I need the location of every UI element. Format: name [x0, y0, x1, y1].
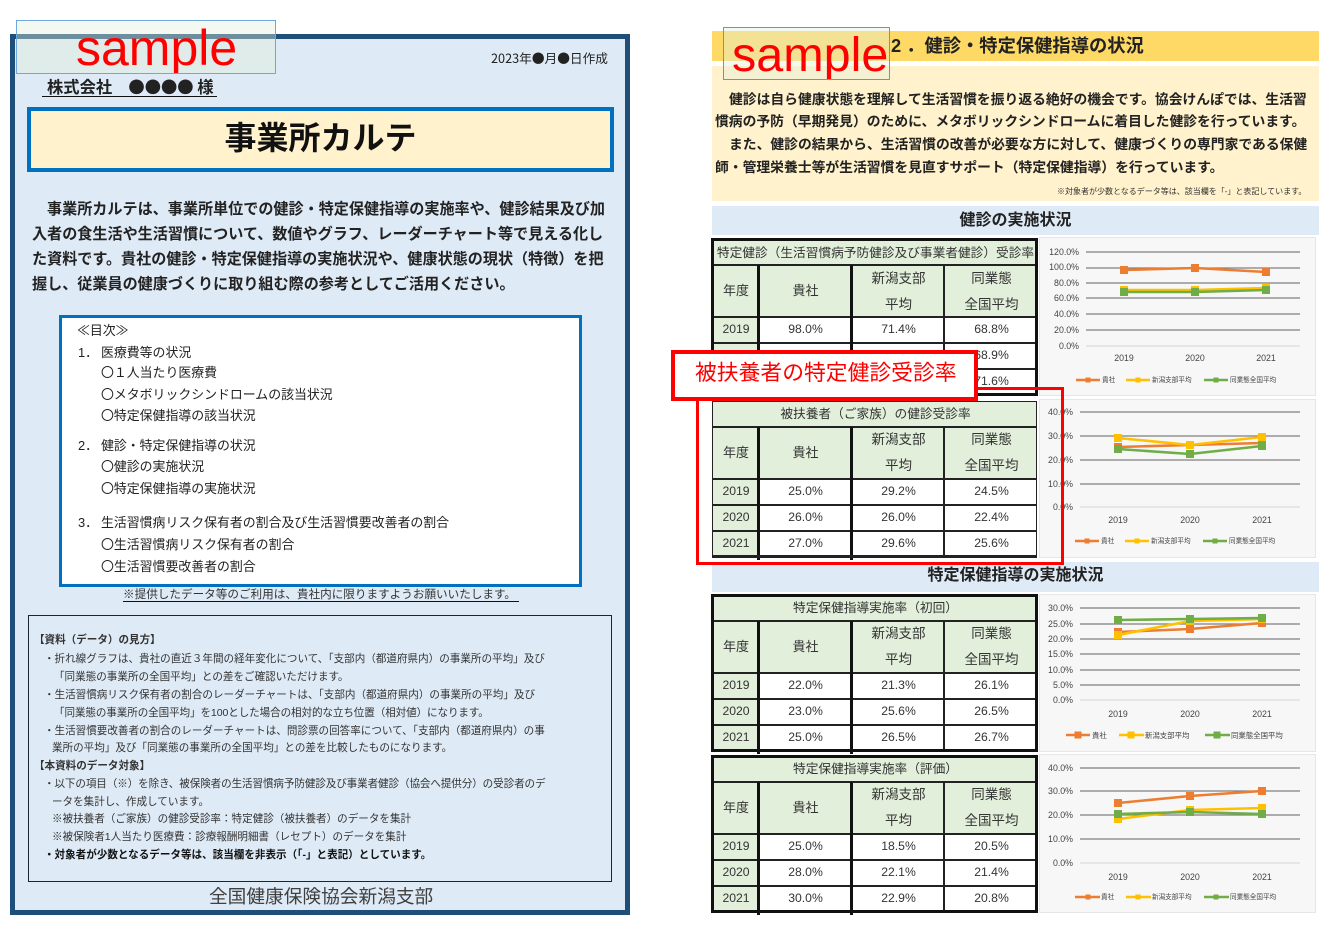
line chart: dependents checkup rate — [1040, 400, 1315, 557]
table: dependents checkup rate: 29.6% — [881, 536, 916, 550]
table: specific checkup rate: 98.0% — [788, 322, 823, 336]
table: dependents checkup rate — [712, 401, 1037, 557]
table: guidance rate evaluation: 20.5% — [974, 839, 1009, 853]
table of contents box: 1． — [78, 345, 98, 360]
table: guidance rate evaluation: 22.9% — [881, 891, 916, 905]
table: guidance rate initial: 26.7% — [974, 730, 1009, 744]
line chart: guidance rate evaluation: 40.0% — [1048, 763, 1073, 773]
line chart: guidance rate initial: 10.0% — [1048, 665, 1073, 675]
table: specific checkup rate: 貴社 — [792, 283, 818, 298]
notes text — [34, 633, 546, 861]
table: guidance rate evaluation: 18.5% — [881, 839, 916, 853]
table of contents box: 生活習慣病リスク保有者の割合及び生活習慣要改善者の割合 — [101, 515, 449, 530]
table: guidance rate evaluation: 全国平均 — [964, 813, 1018, 828]
explanation text: ※対象者が少数となるデータ等は、該当欄を「-」と表記しています。 — [1057, 187, 1306, 196]
table: guidance rate evaluation: 特定保健指導実施率（評価） — [793, 762, 958, 776]
table: guidance rate initial: 同業態 — [971, 626, 1012, 641]
notes text: ・折れ線グラフは、貴社の直近３年間の経年変化について、「支部内（都道府県内）の事業所の平均」及び — [44, 653, 545, 665]
line chart: specific checkup rate: 100.0% — [1049, 262, 1079, 272]
table: dependents checkup rate: 平均 — [885, 458, 912, 473]
table: dependents checkup rate: 全国平均 — [964, 458, 1018, 473]
table: guidance rate evaluation: 2020 — [722, 865, 750, 879]
line chart: specific checkup rate: 2019 — [1114, 353, 1134, 363]
callout: dependents rate: 被扶養者の特定健診受診率 — [695, 360, 957, 385]
line chart: guidance rate evaluation: 2019 — [1108, 872, 1128, 882]
table: dependents checkup rate: 貴社 — [792, 445, 818, 460]
line chart: guidance rate initial: 30.0% — [1048, 603, 1073, 613]
table: guidance rate evaluation: 同業態 — [971, 787, 1012, 802]
line chart: guidance rate evaluation: 新潟支部平均 — [1152, 892, 1192, 901]
line chart: dependents checkup rate: 2019 — [1108, 515, 1128, 525]
table: guidance rate initial: 21.3% — [881, 678, 916, 692]
table: guidance rate evaluation: 30.0% — [788, 891, 823, 905]
notes text: ・対象者が少数となるデータ等は、該当欄を非表示（「-」と表記）としています。 — [44, 849, 431, 861]
line chart: guidance rate initial: 2019 — [1108, 709, 1128, 719]
table of contents box: 〇メタボリックシンドロームの該当状況 — [101, 387, 333, 402]
line chart: guidance rate evaluation: 0.0% — [1053, 858, 1073, 868]
line chart: dependents checkup rate: 30.0% — [1048, 431, 1073, 441]
intro text: た資料です。貴社の健診・特定保健指導の実施状況や、健康状態の現状（特徴）を把 — [32, 251, 604, 268]
line chart: dependents checkup rate: 20.0% — [1048, 455, 1073, 465]
table of contents box — [59, 315, 582, 587]
table: guidance rate initial: 26.5% — [881, 730, 916, 744]
line chart: specific checkup rate: 2021 — [1256, 353, 1276, 363]
table: guidance rate evaluation: 年度 — [723, 800, 749, 815]
title box: 事業所カルテ — [224, 120, 416, 156]
table: dependents checkup rate: 2021 — [722, 536, 750, 550]
table: dependents checkup rate: 26.0% — [788, 510, 823, 524]
data usage notice: ※提供したデータ等のご利用は、貴社内に限りますようお願いいたします。 — [123, 588, 516, 601]
table: guidance rate initial: 25.0% — [788, 730, 823, 744]
notes text: ・生活習慣病リスク保有者の割合のレーダーチャートは、「支部内（都道府県内）の事業所の平均」及び — [44, 689, 535, 701]
table: guidance rate initial: 25.6% — [881, 704, 916, 718]
table: specific checkup rate: 同業態 — [971, 271, 1012, 286]
table: specific checkup rate: 68.8% — [974, 322, 1009, 336]
line chart: dependents checkup rate: 新潟支部平均 — [1151, 536, 1191, 545]
line chart: guidance rate initial: 5.0% — [1053, 680, 1073, 690]
table: guidance rate evaluation — [712, 756, 1037, 912]
line chart: guidance rate initial: 25.0% — [1048, 619, 1073, 629]
line chart: dependents checkup rate: 貴社 — [1101, 536, 1115, 545]
line chart: dependents checkup rate: 2021 — [1252, 515, 1272, 525]
table: guidance rate initial: 新潟支部 — [872, 626, 926, 641]
section heading band: 2 ．健診・特定保健指導の状況 — [891, 35, 1144, 56]
line chart: specific checkup rate: 貴社 — [1102, 375, 1116, 384]
table of contents box: 〇生活習慣要改善者の割合 — [101, 559, 256, 574]
line chart: guidance rate evaluation: 10.0% — [1048, 834, 1073, 844]
table: dependents checkup rate: 25.6% — [974, 536, 1009, 550]
table: dependents checkup rate: 2020 — [722, 510, 750, 524]
table: dependents checkup rate: 29.2% — [881, 484, 916, 498]
table: guidance rate evaluation: 2021 — [722, 891, 750, 905]
explanation text: 慣病の予防（早期発見）のために、メタボリックシンドロームに着目した健診を行っています。 — [715, 114, 1305, 129]
table: guidance rate evaluation: 20.8% — [974, 891, 1009, 905]
table of contents box: 〇健診の実施状況 — [101, 459, 204, 474]
subheading: guidance: 特定保健指導の実施状況 — [927, 567, 1104, 584]
line chart: specific checkup rate: 新潟支部平均 — [1152, 375, 1192, 384]
line chart: guidance rate initial: 貴社 — [1092, 731, 1107, 740]
line chart: dependents checkup rate: 同業態全国平均 — [1229, 536, 1276, 545]
table: dependents checkup rate: 22.4% — [974, 510, 1009, 524]
sample stamp left — [16, 20, 276, 74]
table of contents box: 〇特定保健指導の実施状況 — [101, 481, 256, 496]
line chart: guidance rate evaluation: 2021 — [1252, 872, 1272, 882]
table: dependents checkup rate: 新潟支部 — [872, 432, 926, 447]
line chart: specific checkup rate — [1040, 238, 1315, 395]
notes text: ※被扶養者（ご家族）の健診受診率：特定健診（被扶養者）のデータを集計 — [52, 813, 411, 825]
table: guidance rate initial — [712, 595, 1037, 751]
table: guidance rate initial: 26.1% — [974, 678, 1009, 692]
table of contents box: 〇生活習慣病リスク保有者の割合 — [101, 537, 294, 552]
subheading: checkups — [712, 206, 1319, 235]
line chart: guidance rate evaluation: 20.0% — [1048, 810, 1073, 820]
explanation text: 師・管理栄養士等が生活習慣を見直すサポート（特定保健指導）を行っています。 — [715, 160, 1223, 175]
table: guidance rate evaluation: 22.1% — [881, 865, 916, 879]
notes text: 【本資料のデータ対象】 — [34, 760, 150, 772]
table: guidance rate initial: 2021 — [722, 730, 750, 744]
panel: left cover page — [10, 34, 630, 915]
table: specific checkup rate: 全国平均 — [964, 297, 1018, 312]
line chart: guidance rate initial: 20.0% — [1048, 634, 1073, 644]
explanation text: 健診は自ら健康状態を理解して生活習慣を振り返る絶好の機会です。協会けんぽでは、生活習 — [729, 92, 1307, 107]
footer organisation name: 全国健康保険協会新潟支部 — [209, 886, 433, 907]
subheading: checkups: 健診の実施状況 — [959, 212, 1072, 229]
line chart: guidance rate evaluation — [1040, 755, 1315, 912]
table: specific checkup rate: 2019 — [722, 322, 750, 336]
table of contents box: 医療費等の状況 — [101, 345, 191, 360]
red highlight frame — [696, 387, 1064, 565]
table of contents box: 2． — [78, 438, 98, 453]
intro text: 握し、従業員の健康づくりに取り組む際の参考としてご活用ください。 — [32, 276, 515, 293]
line chart: guidance rate initial: 同業態全国平均 — [1231, 731, 1283, 740]
notes text: 「同業態の事業所の全国平均」との差をご確認いただけます。 — [54, 671, 349, 683]
intro text — [32, 200, 605, 293]
table: guidance rate initial: 2020 — [722, 704, 750, 718]
table: guidance rate evaluation: 25.0% — [788, 839, 823, 853]
table of contents box: 健診・特定保健指導の状況 — [101, 438, 256, 453]
table: guidance rate initial: 年度 — [723, 639, 749, 654]
explanation text — [715, 92, 1307, 196]
table: guidance rate initial: 23.0% — [788, 704, 823, 718]
table: guidance rate evaluation: 貴社 — [792, 800, 818, 815]
table: guidance rate evaluation: 28.0% — [788, 865, 823, 879]
line chart: guidance rate initial: 0.0% — [1053, 695, 1073, 705]
table of contents box: ≪目次≫ — [77, 323, 129, 338]
line chart: guidance rate evaluation: 2020 — [1180, 872, 1200, 882]
table: dependents checkup rate: 2019 — [722, 484, 750, 498]
line chart: guidance rate initial: 2020 — [1180, 709, 1200, 719]
section heading band — [712, 31, 1319, 61]
table: dependents checkup rate: 同業態 — [971, 432, 1012, 447]
table: guidance rate initial: 貴社 — [792, 639, 818, 654]
intro text: 事業所カルテは、事業所単位での健診・特定保健指導の実施率や、健診結果及び加 — [47, 201, 605, 218]
line chart: guidance rate evaluation: 同業態全国平均 — [1230, 892, 1277, 901]
table: specific checkup rate: 年度 — [723, 283, 749, 298]
table: specific checkup rate: 71.4% — [881, 322, 916, 336]
table: specific checkup rate: 平均 — [885, 297, 912, 312]
table of contents box: 3． — [78, 515, 98, 530]
line chart: dependents checkup rate: 0.0% — [1053, 502, 1073, 512]
table: guidance rate evaluation: 21.4% — [974, 865, 1009, 879]
line chart: guidance rate evaluation: 30.0% — [1048, 786, 1073, 796]
line chart: guidance rate evaluation: 貴社 — [1101, 892, 1115, 901]
line chart: specific checkup rate: 同業態全国平均 — [1230, 375, 1277, 384]
line chart: specific checkup rate: 40.0% — [1054, 309, 1079, 319]
table: dependents checkup rate: 27.0% — [788, 536, 823, 550]
explanation panel — [712, 66, 1319, 201]
table: dependents checkup rate: 25.0% — [788, 484, 823, 498]
line chart: guidance rate initial — [1040, 595, 1315, 751]
line chart: guidance rate initial: 15.0% — [1048, 649, 1073, 659]
table: dependents checkup rate: 26.0% — [881, 510, 916, 524]
notes text: ータを集計し、作成しています。 — [52, 796, 209, 808]
line chart: guidance rate initial: 新潟支部平均 — [1145, 731, 1189, 740]
line chart: dependents checkup rate: 2020 — [1180, 515, 1200, 525]
notes box — [28, 615, 612, 882]
table: guidance rate initial: 全国平均 — [964, 652, 1018, 667]
table: guidance rate initial: 平均 — [885, 652, 912, 667]
line chart: specific checkup rate: 0.0% — [1059, 341, 1079, 351]
table: guidance rate evaluation: 2019 — [722, 839, 750, 853]
callout: dependents rate — [671, 350, 978, 401]
table: specific checkup rate: 68.9% — [974, 348, 1009, 362]
table: guidance rate evaluation: 新潟支部 — [872, 787, 926, 802]
table: specific checkup rate: 71.6% — [974, 374, 1009, 388]
notes text: 「同業態の事業所の全国平均」を100とした場合の相対的な立ち位置（相対値）になります。 — [54, 707, 489, 719]
notes text: 【資料（データ）の見方】 — [34, 634, 161, 646]
line chart: specific checkup rate: 60.0% — [1054, 293, 1079, 303]
line chart: specific checkup rate: 2020 — [1185, 353, 1205, 363]
table: guidance rate initial: 2019 — [722, 678, 750, 692]
line chart: specific checkup rate: 120.0% — [1049, 247, 1079, 257]
line chart: dependents checkup rate: 40.0% — [1048, 407, 1073, 417]
table: guidance rate evaluation: 平均 — [885, 813, 912, 828]
notes text: ※被保険者1人当たり医療費：診療報酬明細書（レセプト）のデータを集計 — [52, 831, 406, 843]
line chart: specific checkup rate: 20.0% — [1054, 325, 1079, 335]
table: specific checkup rate: 特定健診（生活習慣病予防健診及び事業者健診）受診率 — [717, 246, 1034, 260]
title box — [27, 107, 614, 172]
notes text: 業所の平均」及び「同業態の事業所の全国平均」との差を比較したものになります。 — [52, 742, 452, 754]
table: specific checkup rate: 新潟支部 — [872, 271, 926, 286]
company name: 株式会社 ●●●● 様 — [47, 74, 214, 98]
intro text: 入者の食生活や生活習慣について、数値やグラフ、レーダーチャート等で見える化し — [32, 226, 603, 243]
date created: 2023年●月●日作成 — [491, 48, 608, 67]
table: guidance rate initial: 26.5% — [974, 704, 1009, 718]
line chart: dependents checkup rate: 10.0% — [1048, 479, 1073, 489]
table: dependents checkup rate: 年度 — [723, 445, 749, 460]
explanation text: また、健診の結果から、生活習慣の改善が必要な方に対して、健康づくりの専門家である保健 — [729, 137, 1307, 152]
line chart: specific checkup rate: 80.0% — [1054, 278, 1079, 288]
table: dependents checkup rate: 24.5% — [974, 484, 1009, 498]
table of contents box: 〇特定保健指導の該当状況 — [101, 408, 256, 423]
notes text: ・生活習慣要改善者の割合のレーダーチャートは、問診票の回答率について、「支部内（都道府県内）の事 — [44, 725, 545, 737]
table: guidance rate initial: 特定保健指導実施率（初回） — [793, 601, 958, 615]
table: guidance rate initial: 22.0% — [788, 678, 823, 692]
table: specific checkup rate — [712, 239, 1037, 395]
notes text: ・以下の項目（※）を除き、被保険者の生活習慣病予防健診及び事業者健診（協会へ提供分）の受診者のデ — [44, 778, 545, 790]
line chart: guidance rate initial: 2021 — [1252, 709, 1272, 719]
subheading: guidance — [712, 562, 1319, 592]
table of contents box: 〇１人当たり医療費 — [101, 365, 217, 380]
table: dependents checkup rate: 被扶養者（ご家族）の健診受診率 — [780, 407, 971, 421]
